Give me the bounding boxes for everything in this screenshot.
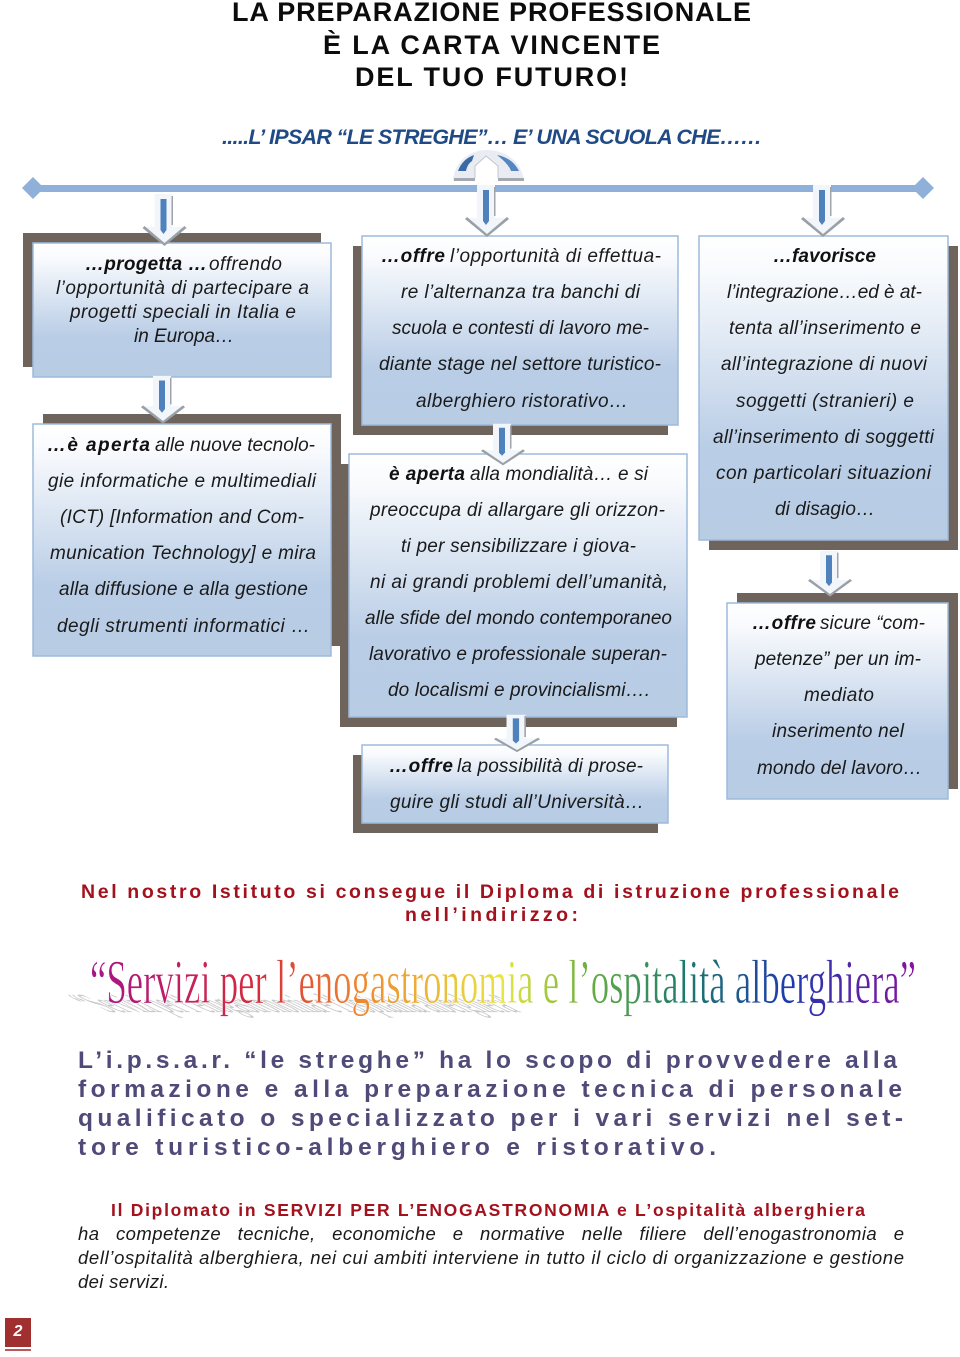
panel: favorisce integrazione: soggetti (stranieri) e (736, 391, 914, 412)
panel: favorisce integrazione: di disagio… (775, 499, 875, 520)
panel: aperta alla mondialità: alle sfide del mondo contemporaneo (365, 608, 672, 629)
panel: favorisce integrazione: all’inserimento di soggetti (713, 427, 935, 448)
icon: curved arrow (453, 150, 524, 181)
red diploma heading: Nel nostro Istituto si consegue il Diploma di istruzione professionale (81, 881, 899, 903)
panel: è aperta nuove tecnologie (33, 414, 341, 656)
panel: progetta: progetti speciali in Italia e (69, 302, 296, 323)
panel: è aperta nuove tecnologie: munication Technology] e mira (50, 543, 316, 564)
panel: aperta alla mondialità: do localismi e provincialismi…. (388, 680, 650, 701)
horizontal connector bar (22, 177, 934, 199)
panel: offre alternanza: re l’alternanza tra banchi di (401, 282, 641, 303)
panel: aperta alla mondialità: alla mondialità… e si (470, 464, 649, 485)
panel: offre università: …offre (389, 756, 453, 777)
panel: favorisce integrazione: tenta all’inserimento e (729, 318, 921, 339)
panel: offre alternanza: …offre (381, 246, 445, 267)
panel: favorisce integrazione: …favorisce (773, 246, 876, 267)
panel: offre competenze: mondo del lavoro… (757, 758, 922, 779)
title (232, 0, 751, 92)
panel: offre competenze: inserimento nel (772, 721, 905, 742)
arrow: to favorisce (801, 185, 845, 237)
panel: è aperta nuove tecnologie: degli strumenti informatici … (57, 616, 310, 637)
panel: offre università: la possibilità di prose- (457, 756, 643, 777)
panel: aperta alla mondialità: lavorativo e professionale superan- (369, 644, 667, 665)
subtitle: .....L’ IPSAR “LE STREGHE”… E’ UNA SCUOLA CHE…… (222, 125, 762, 149)
panel: favorisce integrazione: all’integrazione di nuovi (721, 354, 928, 375)
panel: offre competenze: sicure “com- (820, 613, 925, 634)
panel: è aperta nuove tecnologie: gie informatiche e multimediali (48, 471, 317, 492)
panel: offre competenze: petenze” per un im- (754, 649, 921, 670)
page number (5, 1318, 31, 1351)
diplomato paragraph: dei servizi. (78, 1271, 169, 1292)
purple paragraph: tore turistico-alberghiero e ristorativo. (78, 1134, 716, 1161)
purple paragraph: qualificato o specializzato per i vari servizi nel set- (78, 1105, 903, 1132)
panel: offre competenze: …offre (752, 613, 816, 634)
panel: favorisce integrazione: l’integrazione…ed è at- (727, 282, 922, 303)
arrow: to competenze (808, 551, 852, 597)
panel: progetta: in Europa… (134, 326, 234, 347)
panel: è aperta nuove tecnologie: (ICT) [Information and Com- (60, 507, 304, 528)
page number: 2 (13, 1323, 23, 1340)
panel: offre competenze (727, 593, 958, 799)
arrow: to mondialità (481, 424, 525, 465)
panel: progetta: l’opportunità di partecipare a (56, 278, 309, 299)
panel: aperta alla mondialità (340, 454, 687, 727)
panel: offre università: guire gli studi all’Università… (390, 792, 644, 813)
panel: progetta: offrendo (209, 254, 282, 275)
panel: aperta alla mondialità: preoccupa di allargare gli orizzon- (369, 500, 665, 521)
panel: è aperta nuove tecnologie: alla diffusione e alla gestione (59, 579, 308, 600)
arrow: to è aperta (141, 376, 185, 424)
diplomato paragraph: ha competenze tecniche, economiche e normative nelle filiere dell’enogastronomia e (78, 1223, 904, 1244)
diplomato paragraph: dell’ospitalità alberghiera, nei cui ambiti interviene in tutto il ciclo di organizzazione e gestione (78, 1247, 904, 1268)
title: DEL TUO FUTURO! (355, 62, 628, 92)
red diploma heading (81, 881, 899, 926)
panel: offre alternanza: diante stage nel settore turistico- (379, 354, 661, 375)
title: È LA CARTA VINCENTE (323, 29, 660, 60)
panel: offre competenze: mediato (804, 685, 874, 706)
panel: favorisce integrazione: con particolari situazioni (716, 463, 932, 484)
arrow: to offre alternanza (465, 185, 509, 237)
purple paragraph: L’i.p.s.a.r. “le streghe” ha lo scopo di provvedere alla (78, 1047, 897, 1074)
panel: è aperta nuove tecnologie: …è aperta (47, 435, 150, 456)
panel: aperta alla mondialità: è aperta (389, 464, 465, 485)
diplomato paragraph: Il Diplomato in SERVIZI PER L’ENOGASTRONOMIA e L’ospitalità alberghiera (111, 1200, 865, 1220)
panel: è aperta nuove tecnologie: alle nuove tecnolo- (155, 435, 315, 456)
panel: favorisce integrazione (699, 236, 958, 550)
purple paragraph (78, 1047, 903, 1161)
panel: offre università (353, 745, 668, 833)
panel: aperta alla mondialità: ni ai grandi problemi dell’umanità, (370, 572, 668, 593)
diplomato paragraph (78, 1200, 904, 1292)
panel: offre alternanza: alberghiero ristorativo… (416, 391, 628, 412)
arrow: to progetta (142, 194, 186, 246)
arrow: to università (494, 715, 540, 752)
panel: offre alternanza (353, 236, 678, 435)
panel: offre alternanza: scuola e contesti di lavoro me- (392, 318, 649, 339)
panel: offre alternanza: l’opportunità di effettua- (450, 246, 661, 267)
red diploma heading: nell’indirizzo: (405, 904, 578, 926)
panel: progetta: …progetta … (85, 254, 207, 275)
purple paragraph: formazione e alla preparazione tecnica di personale (78, 1076, 902, 1103)
panel: progetta (23, 233, 331, 377)
panel: aperta alla mondialità: ti per sensibilizzare i giova- (401, 536, 636, 557)
